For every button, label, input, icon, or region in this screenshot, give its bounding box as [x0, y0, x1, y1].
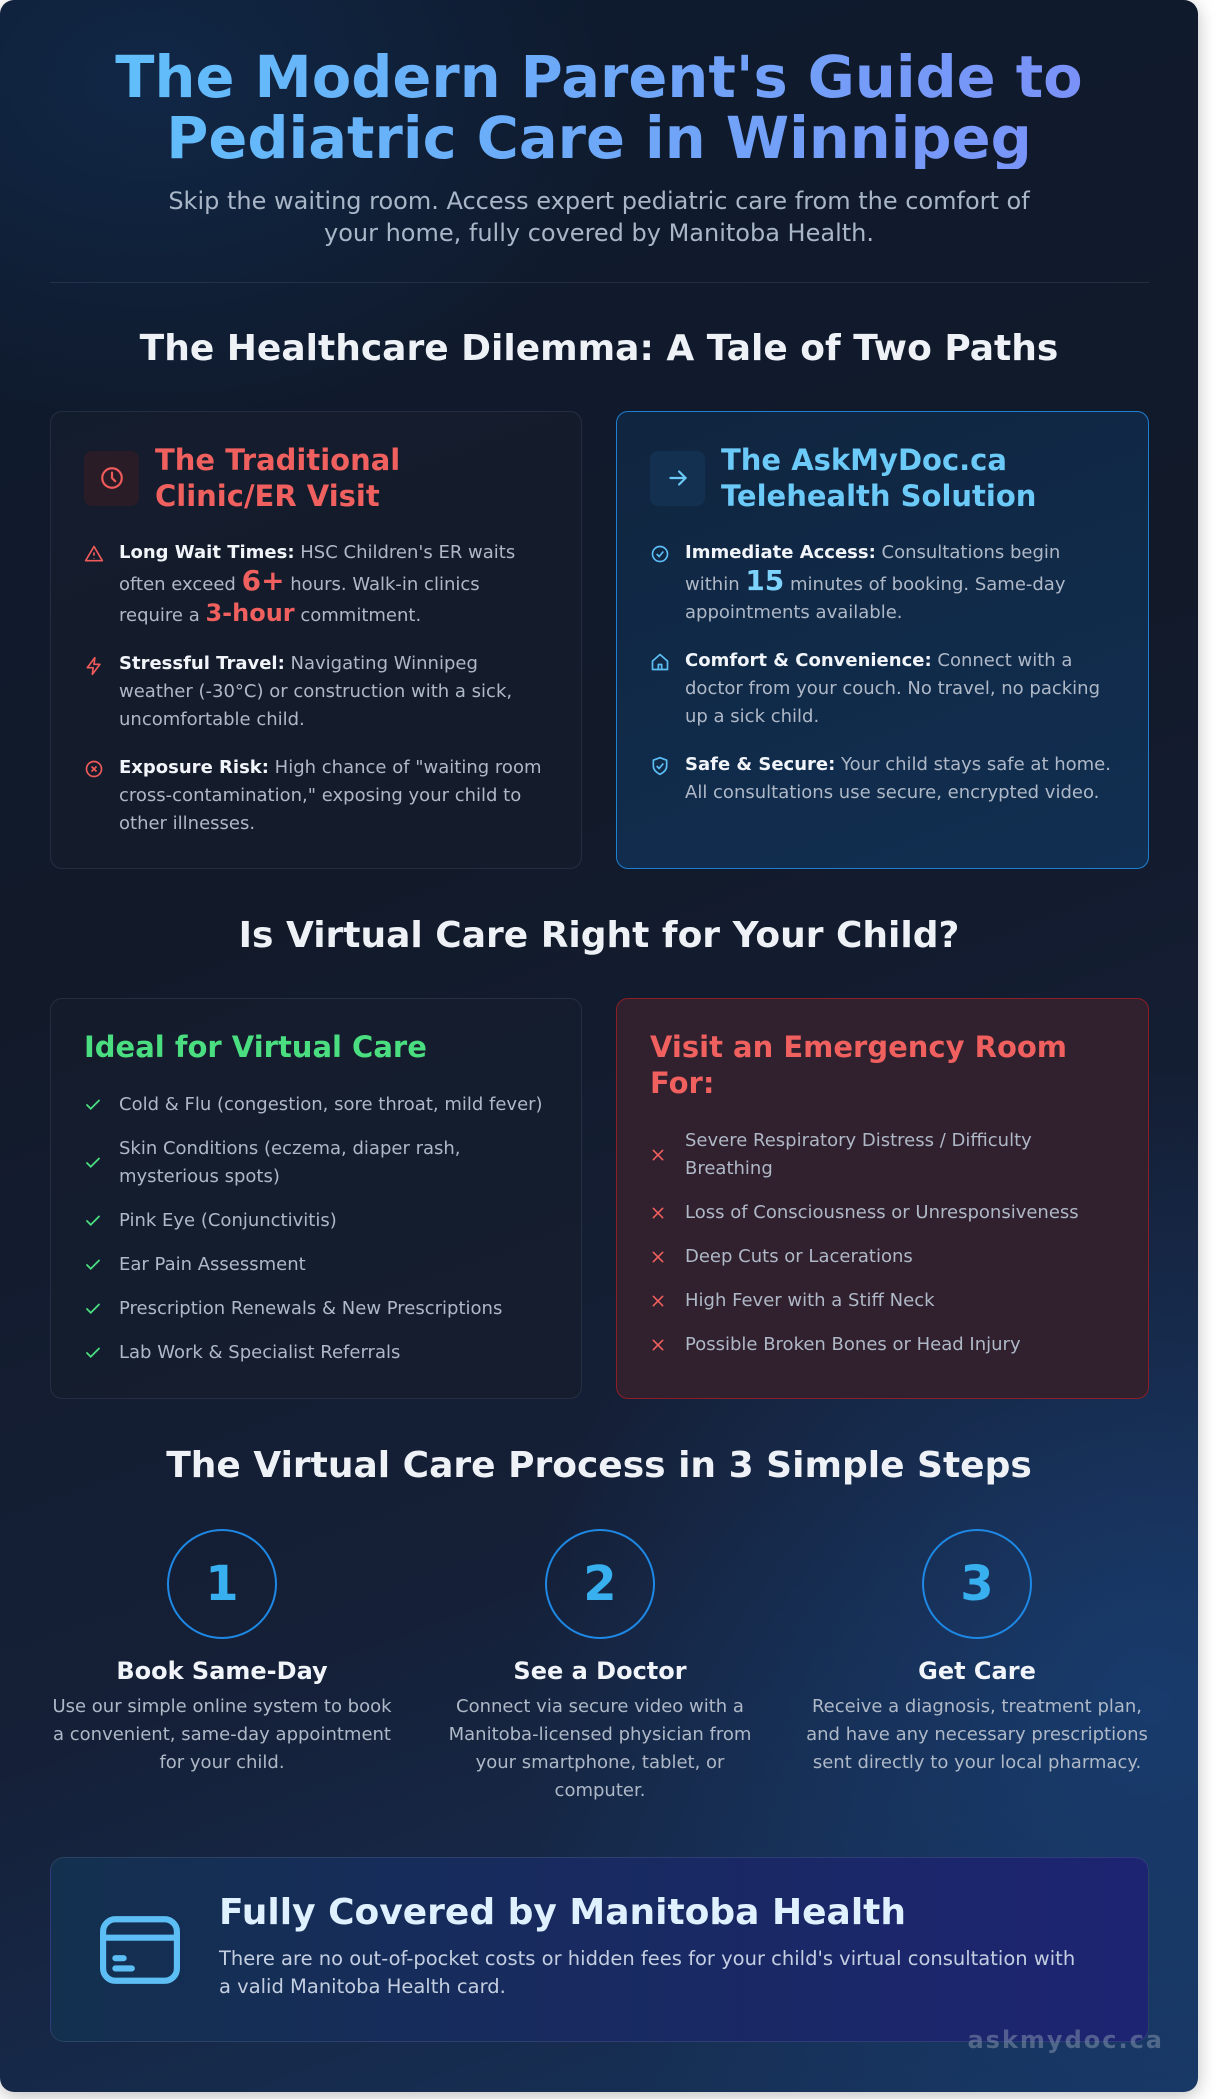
watermark: askmydoc.ca: [967, 2026, 1164, 2054]
step 3: [806, 1529, 1148, 1773]
list: ideal conditions: [86, 1094, 543, 1363]
step 1: 1: [205, 1556, 239, 1612]
list: ER conditions: Possible Broken Bones or Head Injury: [685, 1334, 1021, 1355]
list: ER conditions: [652, 1130, 1079, 1355]
panel heading: traditional: The Traditional: [155, 443, 400, 477]
icon: clock: [84, 450, 139, 506]
title: The Modern Parent's Guide to: [115, 44, 1083, 111]
heading: virtual care right: Is Virtual Care Right for Your Child?: [239, 915, 959, 956]
callout title: Fully Covered by Manitoba Health: [219, 1892, 906, 1933]
item: exposure risk: Exposure Risk: High chance of "waiting room cross-contamination," exposing your child to other illnesses.: [119, 757, 541, 834]
panel: telehealth solution: [616, 411, 1149, 869]
list: ideal conditions: Prescription Renewals & New Prescriptions: [119, 1298, 502, 1319]
heading: ER: [650, 1030, 1067, 1100]
item: stressful travel: Stressful Travel: Navigating Winnipeg weather (-30°C) or construction with a sick, uncomfortable child.: [119, 653, 512, 730]
subtitle: Skip the waiting room. Access expert pediatric care from the comfort of your home, fully covered by Manitoba Health.: [168, 187, 1030, 247]
panel: ideal for virtual care: [50, 998, 582, 1399]
step 1: Use our simple online system to book a convenient, same-day appointment for your child.: [52, 1696, 392, 1773]
step 1: [52, 1529, 392, 1773]
list: ideal conditions: Pink Eye (Conjunctivitis): [119, 1210, 337, 1231]
list: ideal conditions: Lab Work & Specialist Referrals: [119, 1342, 400, 1363]
title: [0, 47, 1198, 169]
icon: arrow: [650, 450, 705, 506]
callout: fully covered: [50, 1857, 1149, 2042]
heading: ER: Visit an Emergency Room: [650, 1030, 1067, 1064]
heading: healthcare dilemma: The Healthcare Dilemma: A Tale of Two Paths: [140, 328, 1058, 369]
list: ER conditions: High Fever with a Stiff Neck: [685, 1290, 935, 1311]
list: ER conditions: Loss of Consciousness or Unresponsiveness: [685, 1202, 1079, 1223]
step 1: Book Same-Day: [116, 1657, 328, 1685]
step 2: 2: [583, 1556, 617, 1612]
icon: card: [100, 1916, 180, 1984]
list: ideal conditions: Skin Conditions (eczema, diaper rash, mysterious spots): [119, 1138, 461, 1187]
step 3: Get Care: [918, 1657, 1036, 1685]
step 2: See a Doctor: [513, 1657, 687, 1685]
panel heading: AskMyDoc: The AskMyDoc.ca: [721, 443, 1007, 477]
panel heading: AskMyDoc: Telehealth Solution: [721, 479, 1036, 513]
list: ideal conditions: Ear Pain Assessment: [119, 1254, 306, 1275]
title: Pediatric Care in Winnipeg: [166, 105, 1032, 172]
step 3: 3: [960, 1556, 994, 1612]
list: ER conditions: Severe Respiratory Distress / Difficulty Breathing: [685, 1130, 1032, 1179]
heading: ER: For:: [650, 1066, 714, 1100]
step 2: Connect via secure video with a Manitoba-licensed physician from your smartphone, tablet, or computer.: [449, 1696, 751, 1801]
heading: process: The Virtual Care Process in 3 Simple Steps: [166, 1445, 1032, 1486]
heading: ideal: Ideal for Virtual Care: [84, 1030, 427, 1064]
step 3: Receive a diagnosis, treatment plan, and have any necessary prescriptions sent directly to your local pharmacy.: [806, 1696, 1148, 1773]
item: immediate access: Immediate Access: Consultations begin within 15 minutes of booking. Same-day appointments available.: [685, 542, 1066, 623]
callout text: There are no out-of-pocket costs or hidden fees for your child's virtual consultation with a valid Manitoba Health card.: [219, 1947, 1075, 1998]
item: safe: Safe & Secure: Your child stays safe at home. All consultations use secure, encrypted video.: [685, 754, 1111, 803]
item: comfort: Comfort & Convenience: Connect with a doctor from your couch. No travel, no packing up a sick child.: [685, 650, 1100, 727]
list: ideal conditions: Cold & Flu (congestion, sore throat, mild fever): [119, 1094, 543, 1115]
step 2: [449, 1529, 751, 1801]
panel heading: traditional: [84, 443, 400, 513]
panel: traditional clinic/ER: [50, 411, 582, 869]
panel: emergency room: [616, 998, 1149, 1399]
list: ER conditions: Deep Cuts or Lacerations: [685, 1246, 913, 1267]
panel heading: AskMyDoc: [650, 443, 1036, 513]
item: long wait times: Long Wait Times: HSC Children's ER waits often exceed 6+ hours. Walk-in clinics require a 3-hour commitment.: [119, 542, 515, 627]
panel heading: traditional: Clinic/ER Visit: [155, 479, 380, 513]
